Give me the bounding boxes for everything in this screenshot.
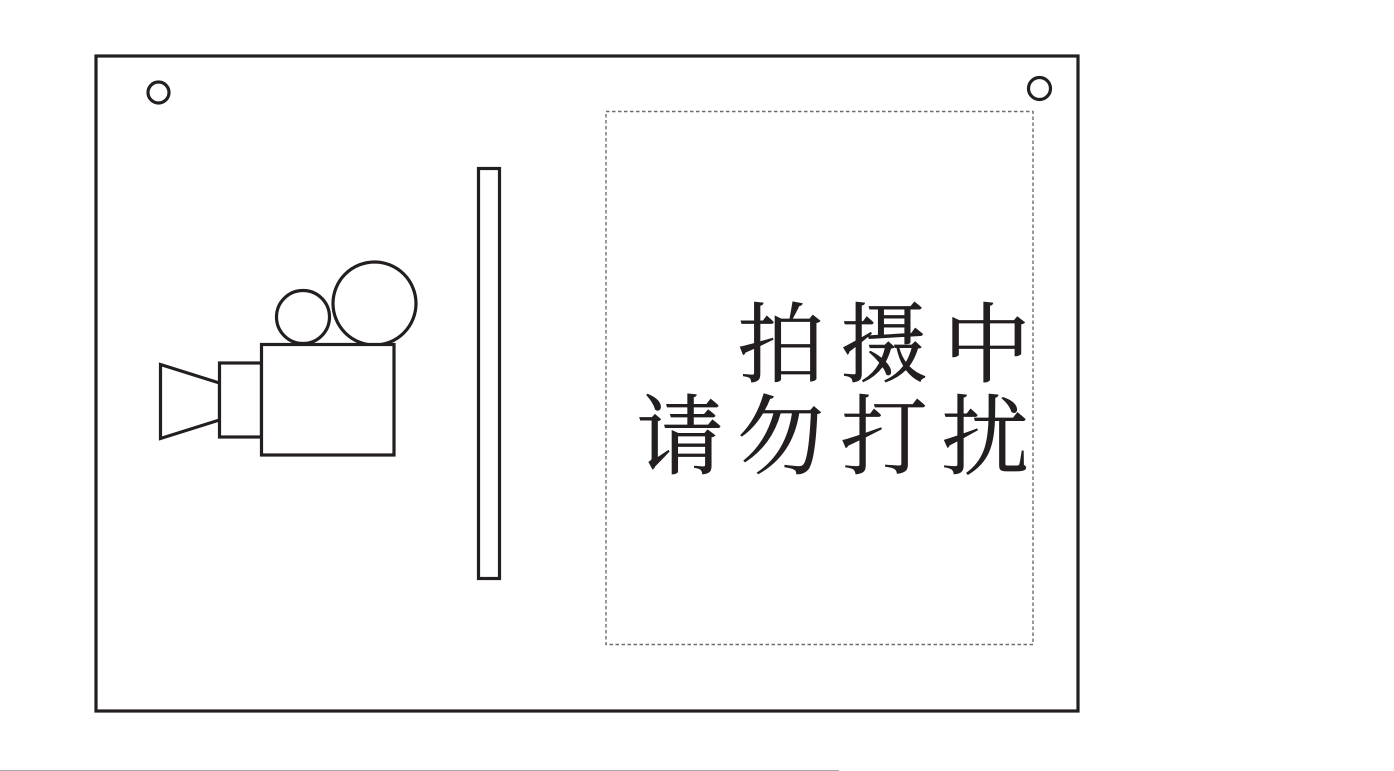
heading line 1	[738, 297, 1030, 394]
icon: film camera	[160, 262, 416, 455]
panel: sign board outline	[96, 56, 1078, 711]
small film reel	[276, 290, 330, 344]
vertical divider bar	[478, 168, 500, 578]
camera lens barrel	[220, 363, 262, 437]
heading line 2: 勿	[738, 389, 824, 486]
heading line 1: 摄	[840, 297, 928, 394]
bottom edge line	[0, 770, 839, 771]
sign text	[636, 297, 1030, 486]
camera body	[262, 344, 394, 455]
camera lens hood	[160, 364, 220, 438]
heading line 2: 打	[840, 389, 928, 486]
dashed text area	[606, 112, 1033, 644]
heading line 1: 中	[944, 297, 1030, 394]
heading line 2	[636, 389, 1028, 486]
icon: left mounting hole	[148, 82, 169, 103]
large film reel	[333, 262, 416, 345]
heading line 1: 拍	[738, 297, 824, 394]
icon: right mounting hole	[1028, 78, 1050, 100]
heading line 2: 扰	[942, 389, 1028, 486]
heading line 2: 请	[636, 389, 724, 486]
